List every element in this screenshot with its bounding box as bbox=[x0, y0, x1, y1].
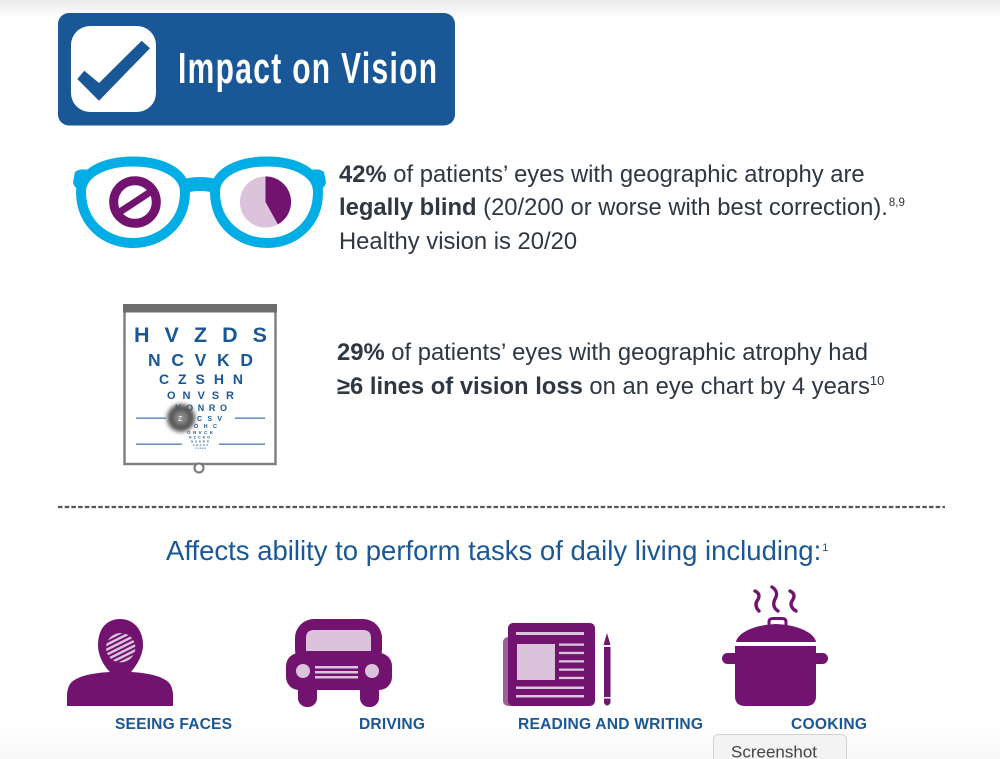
icon: newspaper and pencil bbox=[503, 623, 610, 706]
icon: checkbox with check mark bbox=[71, 26, 156, 112]
icon: eye chart: NSKRD bbox=[191, 440, 210, 444]
blurred vision spot: Z bbox=[178, 416, 183, 423]
heading: Impact on Vision bbox=[178, 43, 437, 92]
icon: eye chart: VORNK bbox=[195, 448, 207, 450]
steam bbox=[755, 587, 796, 611]
text: legally blind statistic: 8,9 bbox=[889, 197, 905, 209]
text: legally blind statistic: legally blind (20/200 or worse with best correction). bbox=[339, 194, 888, 221]
blurred vision spot bbox=[167, 404, 195, 432]
pencil bbox=[604, 633, 610, 706]
icon: eye chart bbox=[123, 304, 277, 472]
icon: glasses bbox=[73, 162, 326, 243]
subheading: tasks of daily living: 1 bbox=[822, 542, 828, 554]
header banner: Impact on Vision bbox=[58, 13, 455, 126]
icon: eye chart: ONVSR bbox=[167, 390, 234, 402]
subheading: tasks of daily living: Affects ability to perform tasks of daily living including: bbox=[166, 535, 821, 566]
text: legally blind statistic: Healthy vision is 20/20 bbox=[339, 228, 577, 255]
icon: seeing faces bbox=[67, 619, 173, 706]
icon: eye chart: ONVCK bbox=[187, 430, 214, 435]
icon: eye chart: KONRO bbox=[175, 403, 227, 413]
text: legally blind statistic: 42% of patients’ eyes with geographic atrophy are bbox=[339, 161, 865, 188]
icon: eye chart: NCVKD bbox=[148, 350, 253, 370]
label: SEEING FACES bbox=[115, 716, 232, 733]
icon: prohibited symbol bbox=[114, 181, 156, 223]
text: legally blind statistic bbox=[339, 161, 905, 255]
icon: eye chart: ZHCSV bbox=[193, 444, 208, 447]
text: vision loss statistic: ≥6 lines of vision loss on an eye chart by 4 years bbox=[337, 373, 870, 400]
icon: 42% pie chart bbox=[240, 176, 291, 228]
label: READING AND WRITING bbox=[518, 716, 703, 733]
label: COOKING bbox=[791, 716, 867, 733]
blurred face patch bbox=[106, 633, 136, 662]
text: vision loss statistic bbox=[337, 339, 884, 400]
icon: eye chart: VOHC bbox=[185, 424, 217, 430]
text: vision loss statistic: 10 bbox=[870, 373, 884, 388]
icon: eye chart: HZCKO bbox=[189, 436, 210, 440]
icon: eye chart: HVZDS bbox=[134, 323, 267, 347]
icon: car bbox=[286, 619, 392, 707]
screenshot tooltip bbox=[714, 734, 846, 759]
text: vision loss statistic: 29% of patients’ eyes with geographic atrophy had bbox=[337, 339, 868, 366]
label: DRIVING bbox=[359, 716, 425, 733]
icon: eye chart: CSV bbox=[197, 416, 222, 423]
icon: eye chart: CZSHN bbox=[159, 371, 243, 387]
icon: cooking pot bbox=[722, 587, 828, 706]
